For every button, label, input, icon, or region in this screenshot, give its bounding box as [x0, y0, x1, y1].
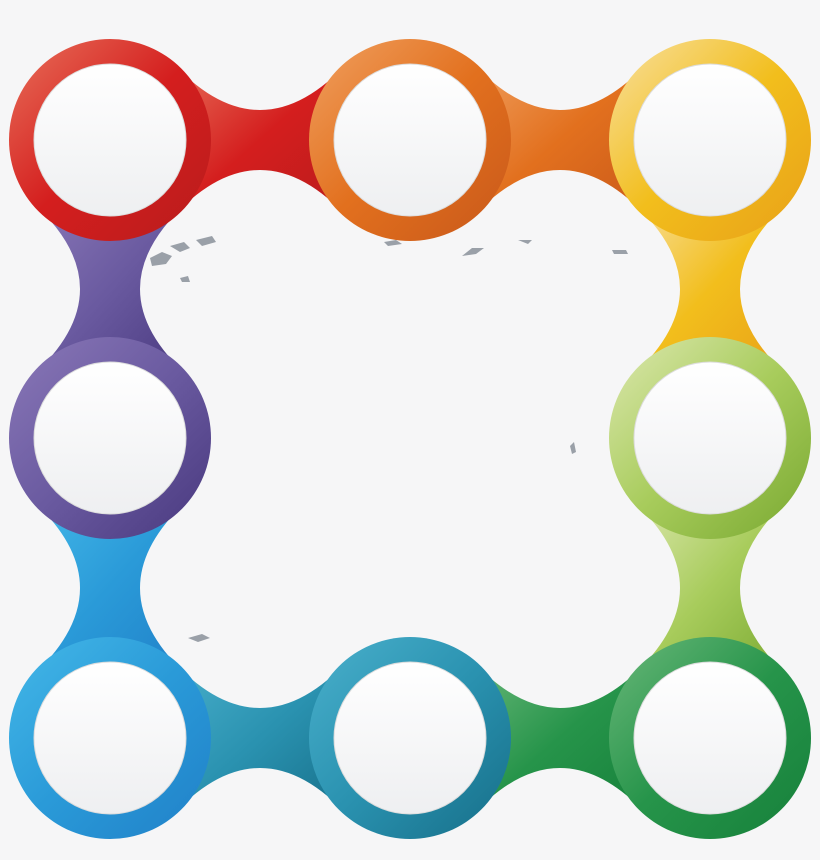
ring: teal	[309, 637, 511, 839]
ring: purple	[9, 337, 211, 539]
decorative grey splotches	[150, 236, 628, 642]
connector: left upper (purple)	[30, 200, 190, 378]
connector: left lower (blue)	[30, 498, 190, 678]
connector: right lower (light green)	[630, 498, 790, 678]
ring: orange	[309, 39, 511, 241]
ring: green	[609, 637, 811, 839]
ring: yellow	[609, 39, 811, 241]
connector: right upper (yellow)	[630, 200, 790, 378]
connector: bottom left (teal)	[170, 658, 350, 818]
ring: red	[9, 39, 211, 241]
ring: blue	[9, 637, 211, 839]
connector: top left (red)	[170, 60, 350, 220]
ring: light green	[609, 337, 811, 539]
connector: top right (orange)	[470, 60, 650, 220]
connector: bottom right (green)	[470, 658, 650, 818]
